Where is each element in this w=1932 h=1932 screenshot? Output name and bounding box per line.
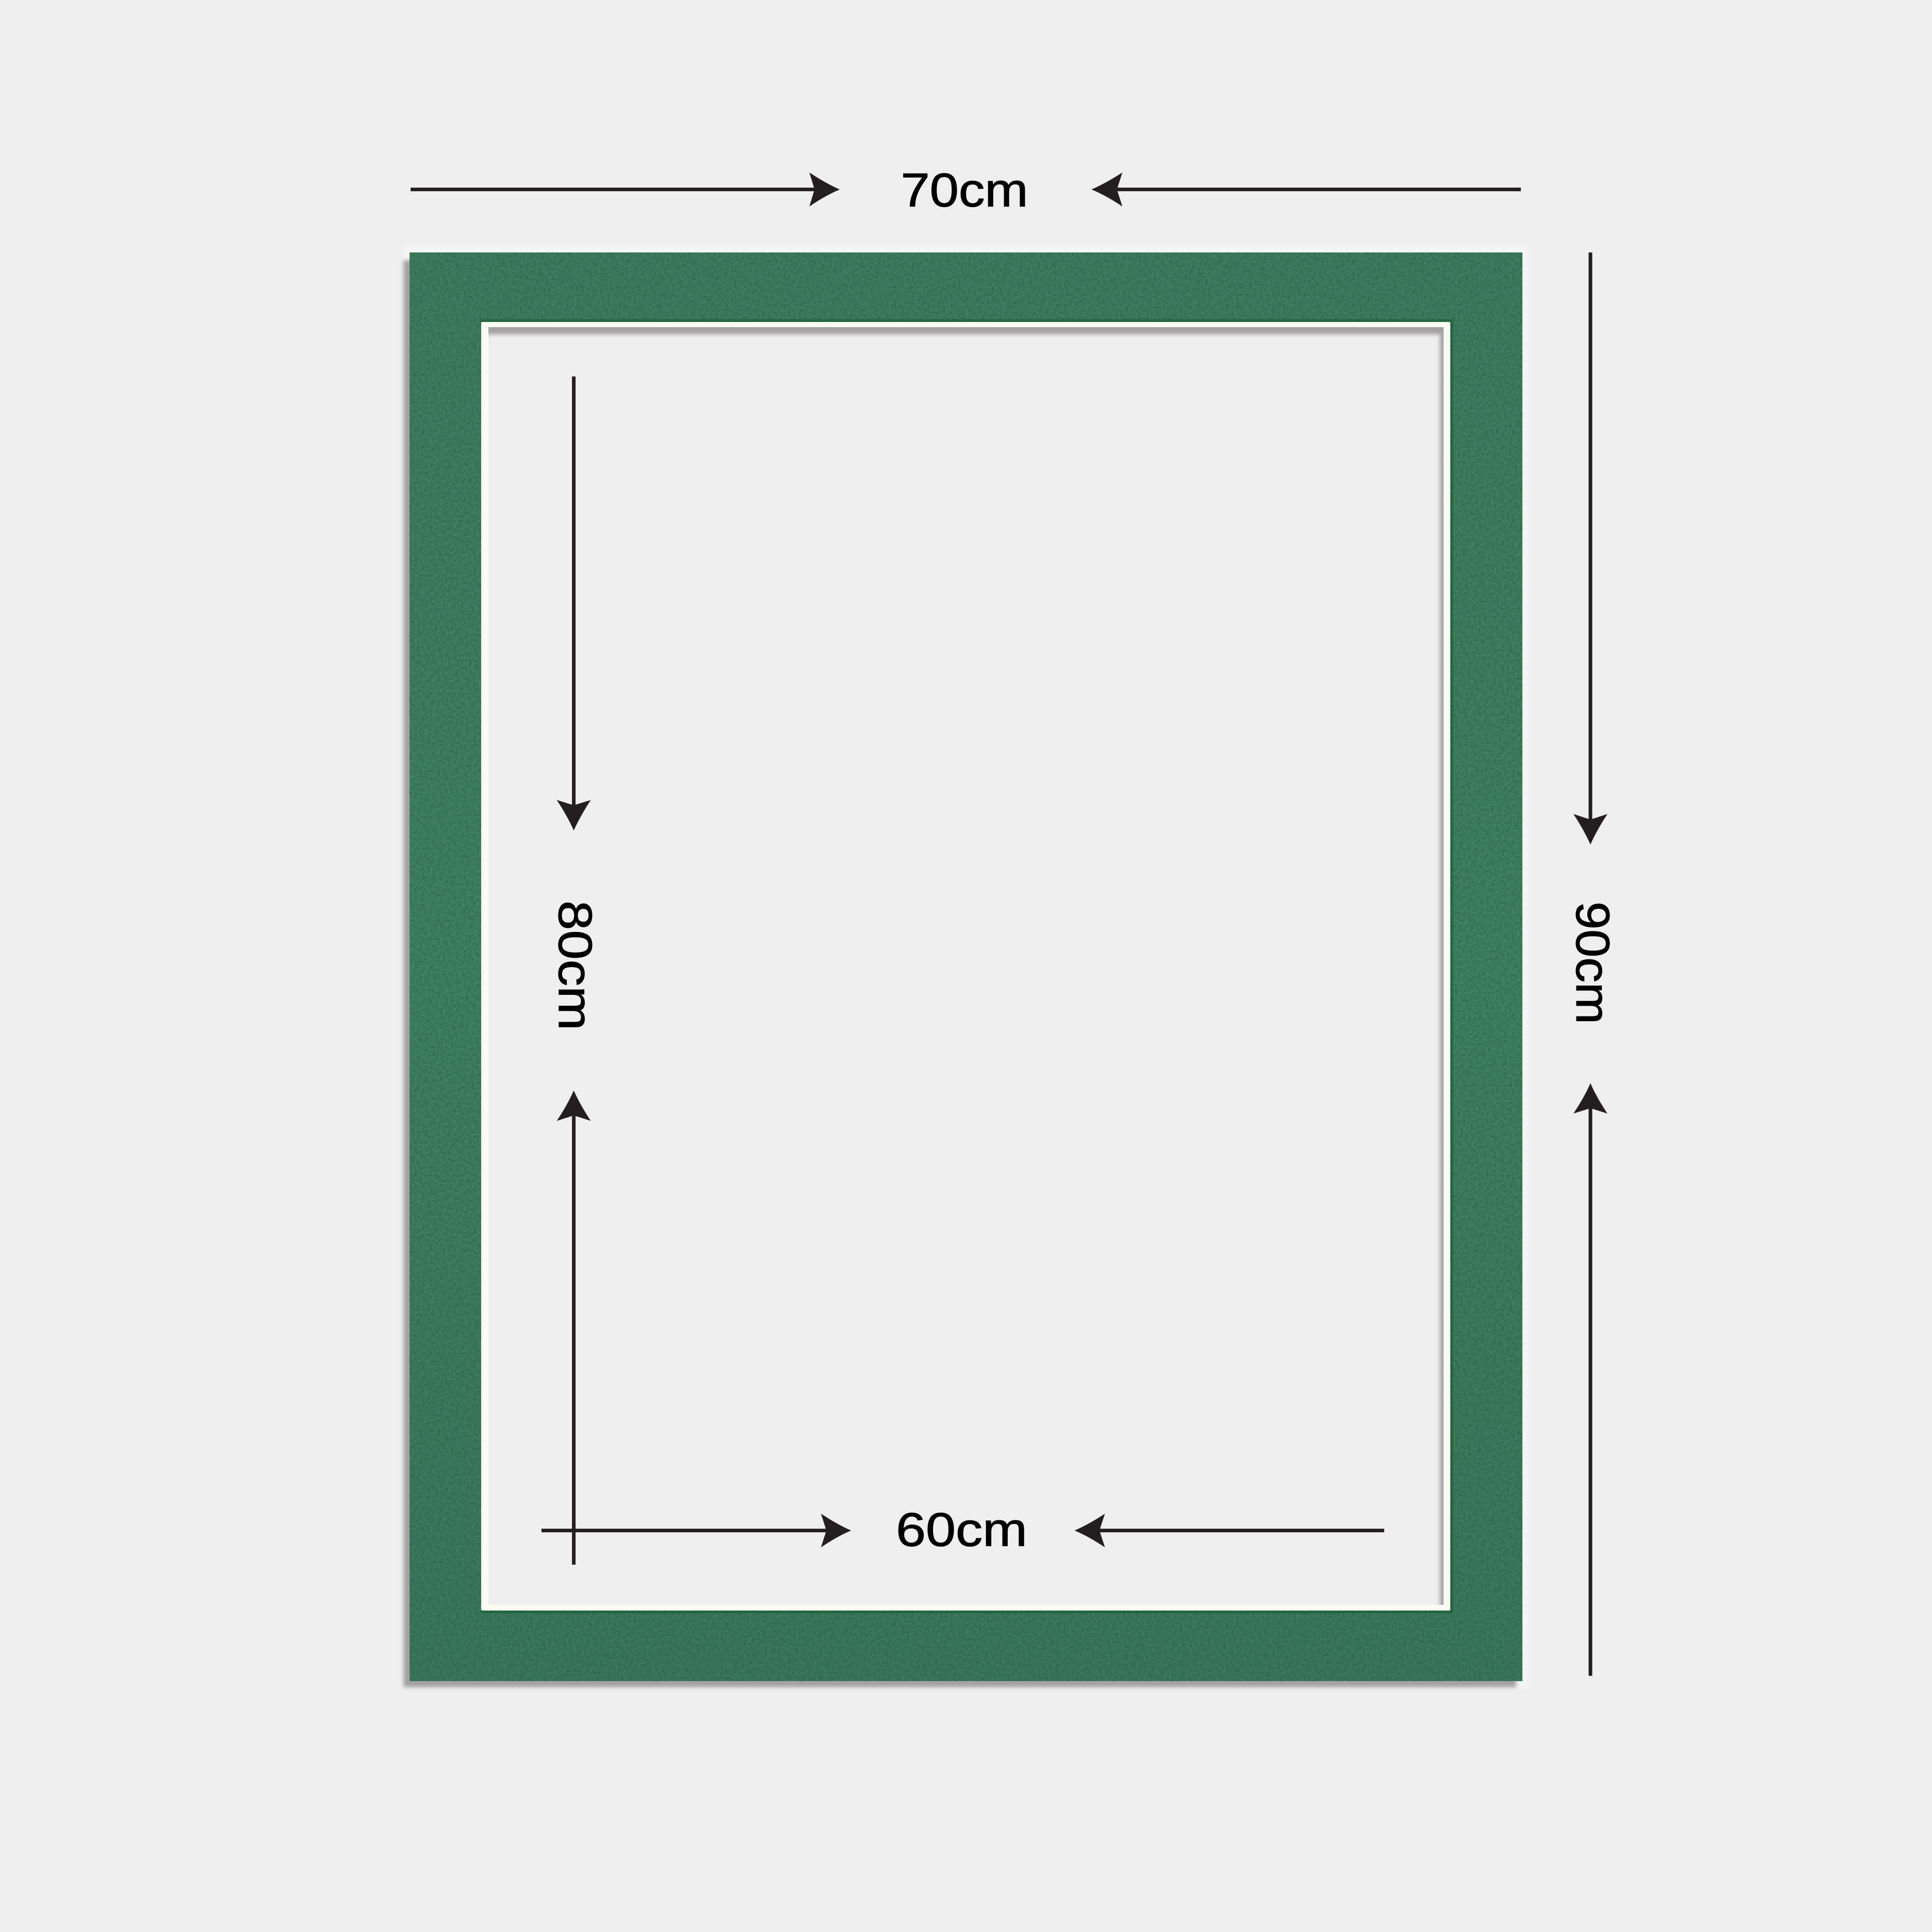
- inner shadow: [479, 314, 1453, 1615]
- mat paper grain: [410, 252, 1522, 1681]
- panel: green mat board: [403, 246, 1529, 1688]
- label: 70cm: 70cm: [901, 164, 1028, 217]
- label: 80cm: 80cm: [549, 901, 601, 1030]
- arrow: outer width, right: [1091, 173, 1521, 207]
- arrow: window height, top: [557, 377, 591, 831]
- label: 60cm: 60cm: [896, 1503, 1027, 1556]
- mat surface: [410, 252, 1522, 1681]
- label: 90cm: 90cm: [1566, 902, 1619, 1024]
- arrow: outer height, bottom: [1573, 1083, 1607, 1676]
- arrow: window width, left: [541, 1514, 851, 1547]
- mat glow: [403, 246, 1529, 1688]
- cream bevel: [481, 322, 1450, 1611]
- arrow: outer height, top: [1573, 252, 1607, 844]
- arrow: outer width, left: [411, 173, 840, 207]
- dark cut edge: [480, 320, 1452, 1612]
- window opening: [488, 327, 1444, 1605]
- arrow: window width, right: [1075, 1514, 1384, 1547]
- mat drop shadow: [403, 260, 1516, 1687]
- arrow: window height, bottom: [557, 1091, 591, 1565]
